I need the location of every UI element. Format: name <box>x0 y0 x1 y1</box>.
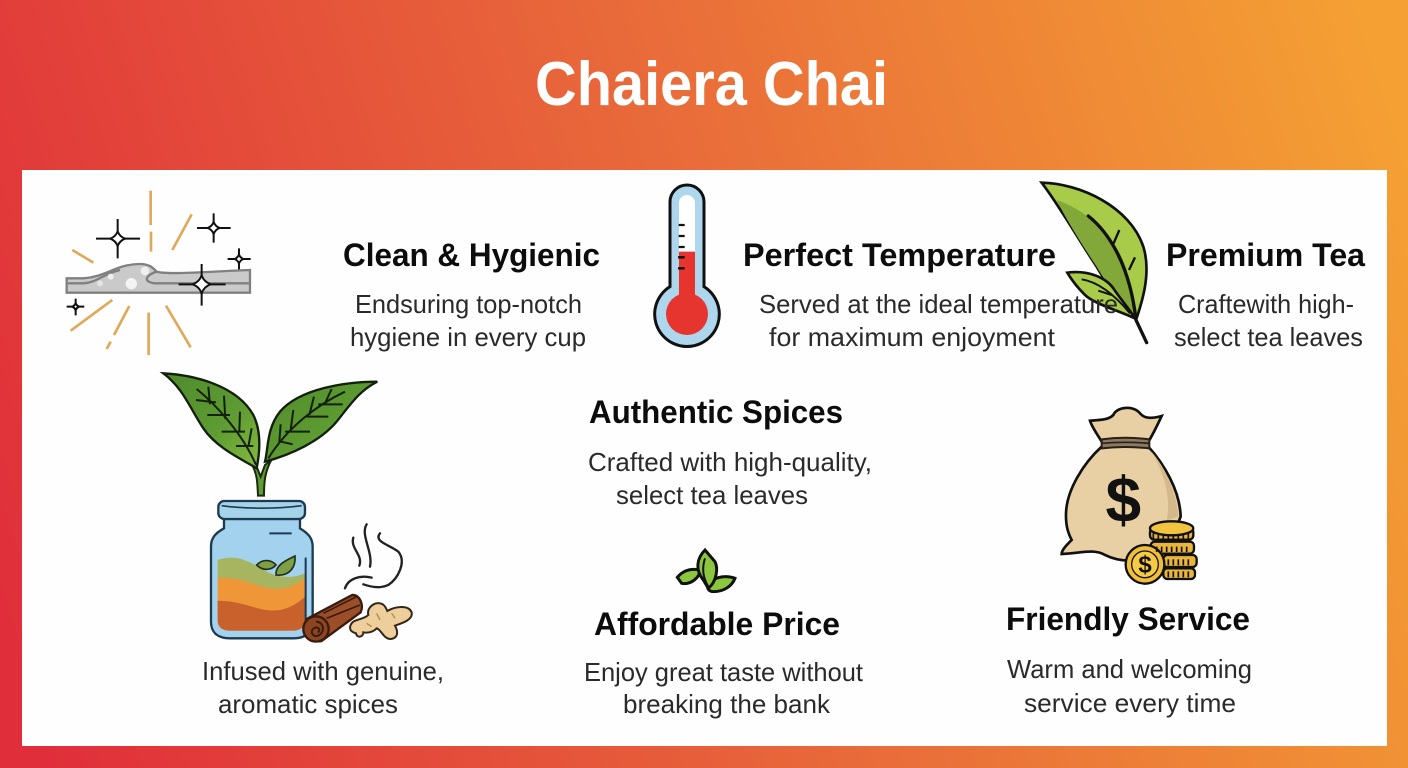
panel: white content card <box>22 170 1387 746</box>
icon: money bag with coins <box>1062 408 1197 584</box>
text block: Authentic Spices: select tea leaves <box>616 480 808 510</box>
text block: Affordable Price <box>584 606 864 719</box>
text block: Premium Tea: select tea leaves <box>1174 322 1363 352</box>
icon: money bag with coins: $ <box>1106 463 1141 535</box>
text block: Perfect Temperature: for maximum enjoyment <box>769 322 1056 352</box>
icon: spice jar with tea leaves, cinnamon and ginger <box>163 373 412 642</box>
text block: spices caption: Infused with genuine, <box>202 656 444 686</box>
text block: Clean & Hygienic: Clean & Hygienic <box>343 237 600 273</box>
text block: Authentic Spices: Authentic Spices <box>589 394 843 430</box>
text block: Premium Tea: Craftewith high- <box>1178 289 1354 319</box>
icon: sparkling clean surface <box>67 191 251 355</box>
text block: Authentic Spices: Crafted with high-quality, <box>588 447 872 477</box>
text block: spices caption: aromatic spices <box>218 689 398 719</box>
icon: premium tea leaf <box>1042 183 1147 343</box>
text block: Authentic Spices <box>588 394 872 510</box>
text block: Clean & Hygienic: hygiene in every cup <box>350 322 586 352</box>
text block: Premium Tea: Premium Tea <box>1166 237 1365 273</box>
text block: Perfect Temperature: Served at the ideal temperature <box>759 289 1118 319</box>
text block: spices caption <box>202 656 444 719</box>
text block: Affordable Price: breaking the bank <box>623 689 831 719</box>
text block: Affordable Price: Affordable Price <box>594 606 840 642</box>
icon: small green leaves <box>677 550 735 592</box>
icon: thermometer <box>655 185 719 346</box>
text block: Perfect Temperature <box>743 237 1118 352</box>
text block: Friendly Service <box>1006 601 1252 718</box>
text block: Clean & Hygienic: Endsuring top-notch <box>355 289 582 319</box>
text block: Premium Tea <box>1166 237 1365 352</box>
text block: Friendly Service: service every time <box>1024 688 1236 718</box>
text block: Friendly Service: Warm and welcoming <box>1007 654 1252 684</box>
text block: Friendly Service: Friendly Service <box>1006 601 1250 637</box>
text block: Affordable Price: Enjoy great taste without <box>584 657 864 687</box>
text block: Perfect Temperature: Perfect Temperature <box>743 237 1056 273</box>
icon: money bag with coins: $ <box>1138 552 1152 579</box>
text block: Clean & Hygienic <box>343 237 600 352</box>
title: Chaiera Chai <box>535 50 888 119</box>
